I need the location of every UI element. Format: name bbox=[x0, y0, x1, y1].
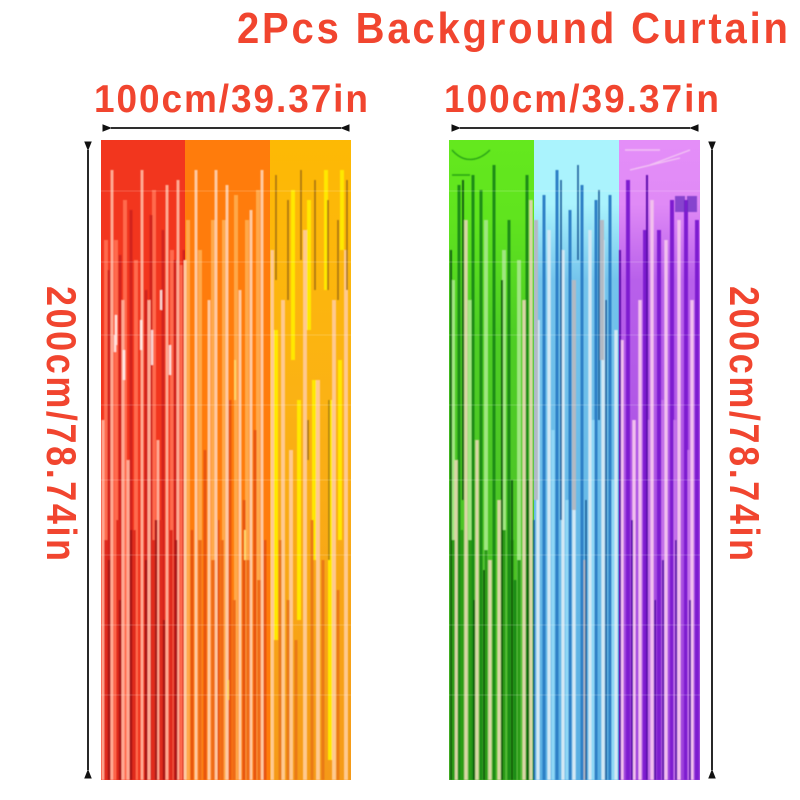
height arrow: cool curtain bbox=[711, 150, 713, 770]
width label: warm curtain: 100cm/39.37in bbox=[94, 78, 368, 121]
panel: warm foil curtain bbox=[101, 140, 351, 780]
height label: cool curtain: 200cm/78.74in bbox=[720, 286, 766, 561]
height label: warm curtain: 200cm/78.74in bbox=[37, 286, 83, 561]
purple section bbox=[619, 140, 700, 780]
blue section bbox=[534, 140, 619, 780]
foil fold bands bbox=[449, 191, 700, 695]
yellow section bbox=[270, 140, 351, 780]
foil fold bands bbox=[101, 191, 351, 695]
width arrow: warm curtain bbox=[111, 127, 341, 129]
red section bbox=[101, 140, 185, 780]
green section bbox=[449, 140, 534, 780]
panel: cool foil curtain bbox=[449, 140, 700, 780]
width arrow: cool curtain bbox=[460, 127, 690, 129]
title: 2Pcs Background Curtain bbox=[237, 3, 788, 52]
height arrow: warm curtain bbox=[87, 150, 89, 770]
orange section bbox=[185, 140, 270, 780]
width label: cool curtain: 100cm/39.37in bbox=[444, 78, 719, 121]
